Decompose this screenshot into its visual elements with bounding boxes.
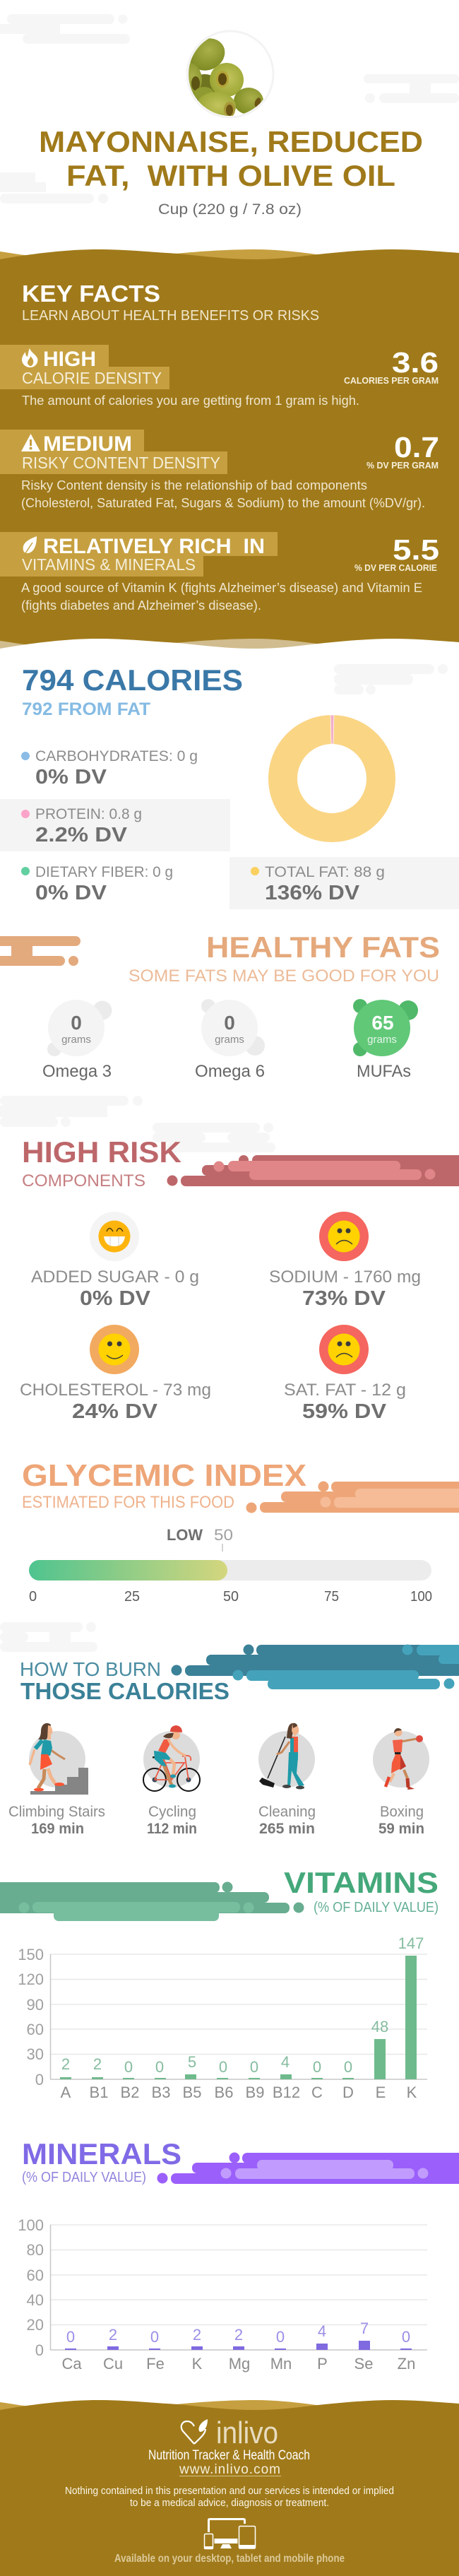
bar chart: minerals: 100 [18, 2216, 44, 2234]
bar chart: vitamins: B9 [246, 2084, 264, 2101]
icon: grinning face [99, 1221, 130, 1252]
fat badge: omega 6 [195, 999, 265, 1081]
fact: vitamins and minerals: % DV PER CALORIE [354, 562, 437, 573]
key facts subheading: LEARN ABOUT HEALTH BENEFITS OR RISKS [22, 308, 319, 324]
risk item: saturated fat: SAT. FAT - 12 g [284, 1381, 406, 1400]
bar chart: minerals: 4 [318, 2322, 326, 2340]
risk item: added sugar [31, 1212, 199, 1310]
fat badge: MUFAs: grams [367, 1034, 397, 1046]
activity: cleaning: Cleaning [258, 1804, 316, 1820]
gauge: glycemic index: LOW [167, 1526, 203, 1544]
bar chart: vitamins: 90 [27, 1996, 44, 2014]
bar chart: minerals: 60 [27, 2267, 44, 2284]
heading: how to burn [20, 1658, 230, 1704]
gauge: glycemic index: 0 [29, 1589, 37, 1605]
fact: calorie density: The amount of calories you are getting from 1 gram is high. [22, 394, 359, 408]
fat badge: omega 3: 0 [71, 1012, 82, 1034]
fat badge: MUFAs: MUFAs [357, 1062, 411, 1081]
fact: vitamins and minerals: (fights diabetes and Alzheimer’s disease). [21, 598, 261, 613]
risk item: sodium [269, 1212, 421, 1310]
bar chart: minerals: 80 [27, 2241, 44, 2259]
bar chart: vitamins: 60 [27, 2021, 44, 2038]
bar chart: vitamins: A [61, 2084, 71, 2101]
icon: flame [22, 348, 37, 367]
fact: calorie density: CALORIES PER GRAM [344, 375, 439, 386]
title [39, 125, 423, 192]
fact: vitamins and minerals: RELATIVELY RICH IN [43, 535, 265, 558]
bar chart: minerals: Zn [398, 2355, 415, 2373]
legend: total fat: 136% DV [265, 882, 360, 904]
fact: risky content density: % DV PER GRAM [366, 460, 439, 471]
bar chart: vitamins: 2 [93, 2055, 102, 2073]
fact: calorie density [0, 345, 439, 408]
risk item: saturated fat: 59% DV [302, 1400, 387, 1423]
logo: inlivo: inlivo [216, 2416, 278, 2450]
bar chart: vitamins: B2 [121, 2084, 139, 2101]
activity: boxing: Boxing [380, 1804, 424, 1820]
legend: carbohydrates: 0% DV [35, 766, 107, 788]
bar chart: vitamins: D [342, 2084, 354, 2101]
legend: protein: 2.2% DV [35, 824, 128, 846]
tagline: Nutrition Tracker & Health Coach [148, 2448, 310, 2463]
bar chart: minerals: 2 [234, 2326, 243, 2344]
legend: total fat [230, 857, 459, 909]
bar chart: minerals: 0 [150, 2328, 159, 2346]
bar chart: vitamins: 0 [35, 2071, 44, 2088]
bar chart: minerals: 40 [27, 2291, 44, 2309]
bar chart: vitamins: B12 [273, 2084, 300, 2101]
legend: protein [0, 799, 230, 851]
gauge: glycemic index [29, 1526, 432, 1605]
activity: climbing stairs: Climbing Stairs [8, 1804, 105, 1820]
legend: protein: PROTEIN: 0.8 g [35, 806, 142, 822]
decoration: high risk stripes [167, 1155, 459, 1186]
bar chart: minerals: P [317, 2355, 328, 2373]
icon: woman climbing stairs [30, 1723, 88, 1795]
bar chart: minerals: 0 [35, 2341, 44, 2359]
bar chart: vitamins: 150 [18, 1946, 44, 1963]
subheading: minerals daily value: (% OF DAILY VALUE) [22, 2170, 146, 2185]
legend: dietary fiber [21, 864, 173, 904]
title: MAYONNAISE, REDUCED [39, 125, 423, 158]
background cloud: right [364, 74, 459, 103]
heading: how to burn: THOSE CALORIES [20, 1678, 230, 1704]
icon: smiling face [99, 1334, 130, 1365]
background cloud: top left [0, 14, 130, 44]
bar chart: minerals: 0 [276, 2328, 285, 2346]
heading: glycemic index: GLYCEMIC INDEX [22, 1458, 306, 1493]
bar chart: minerals: Ca [61, 2355, 82, 2373]
icon: devices [204, 2519, 256, 2549]
bar chart: vitamins [18, 1934, 427, 2101]
background cloud: left [0, 172, 108, 203]
website link: www.inlivo.com [179, 2462, 280, 2477]
food photo: olives [186, 30, 274, 119]
serving size: Cup (220 g / 7.8 oz) [158, 201, 302, 218]
fat badge: omega 6: Omega 6 [195, 1062, 265, 1081]
activity: cleaning [258, 1723, 316, 1837]
fact: risky content density [0, 430, 439, 510]
icon: sad face [328, 1221, 360, 1252]
disclaimer: to be a medical advice, diagnosis or treatment. [130, 2497, 329, 2509]
fat badge: omega 3 [42, 1000, 112, 1081]
gauge: glycemic index: 50 [223, 1589, 239, 1605]
gauge: glycemic index: 25 [124, 1589, 140, 1605]
decoration: vitamins stripes [0, 1882, 304, 1921]
fact: calorie density: 3.6 [392, 346, 439, 379]
bar chart: minerals: Mn [270, 2355, 292, 2373]
fat badge: omega 3: grams [61, 1034, 91, 1046]
gauge: glycemic index: 100 [410, 1589, 432, 1605]
background cloud: high risk left [0, 1096, 143, 1127]
risk item: sodium: 73% DV [302, 1287, 386, 1310]
bar chart: vitamins: 4 [281, 2053, 290, 2071]
risk item: saturated fat [284, 1325, 406, 1423]
bar chart: minerals [18, 2216, 427, 2373]
decoration: minerals stripes [157, 2152, 459, 2184]
activity: boxing [373, 1728, 429, 1837]
bar chart: vitamins: E [376, 2084, 386, 2101]
fat badge: MUFAs: 65 [371, 1012, 394, 1034]
bar chart: vitamins: 5 [188, 2053, 196, 2071]
risk item: sodium: SODIUM - 1760 mg [269, 1268, 421, 1287]
bar chart: minerals: 0 [402, 2328, 410, 2346]
bar chart: vitamins: C [311, 2084, 323, 2101]
activity: cycling: Cycling [148, 1804, 196, 1820]
panel: footer [0, 2400, 459, 2576]
bar chart: vitamins: 48 [371, 2018, 388, 2036]
risk item: cholesterol [20, 1325, 211, 1423]
heading: minerals: MINERALS [22, 2137, 181, 2170]
icon: sad face [328, 1334, 360, 1365]
fact: risky content density: 0.7 [394, 431, 439, 463]
activity: climbing stairs: 169 min [31, 1821, 84, 1837]
risk item: added sugar: ADDED SUGAR - 0 g [31, 1268, 199, 1287]
fat badge: omega 3: Omega 3 [42, 1062, 112, 1081]
bar chart: minerals: 7 [360, 2320, 369, 2337]
background cloud: calories [334, 664, 448, 695]
activity: cleaning: 265 min [259, 1821, 315, 1837]
decoration: glycemic stripes [246, 1481, 459, 1513]
donut chart: calorie sources [282, 715, 381, 828]
legend: dietary fiber: 0% DV [35, 882, 107, 904]
gauge: glycemic index: 75 [324, 1589, 339, 1605]
legend: dietary fiber: DIETARY FIBER: 0 g [35, 864, 173, 880]
fact: risky content density: (Cholesterol, Saturated Fat, Sugars & Sodium) to the amount (%DV/gr). [21, 496, 425, 510]
activity: cycling: 112 min [147, 1821, 197, 1837]
bar chart: minerals: Se [354, 2355, 373, 2373]
activity: boxing: 59 min [378, 1821, 424, 1837]
fact: calorie density: HIGH [43, 348, 96, 371]
subheading: glycemic index: ESTIMATED FOR THIS FOOD [22, 1493, 234, 1512]
disclaimer: Nothing contained in this presentation and our services is intended or implied [65, 2485, 394, 2497]
disclaimer [65, 2485, 394, 2509]
bar chart: vitamins: B5 [183, 2084, 201, 2101]
subheading: healthy fats: SOME FATS MAY BE GOOD FOR YOU [129, 967, 439, 986]
activity: climbing stairs [8, 1723, 105, 1837]
top wave [0, 249, 459, 268]
bottom wave [0, 639, 459, 658]
bar chart: minerals: 2 [109, 2326, 117, 2344]
icon: boxer [386, 1728, 423, 1790]
heading: healthy fats: HEALTHY FATS [206, 930, 440, 964]
fat badge: omega 6: 0 [224, 1012, 235, 1034]
fact: vitamins and minerals: VITAMINS & MINERALS [22, 555, 196, 574]
icon: woman sweeping [259, 1723, 304, 1789]
risk item: cholesterol: CHOLESTEROL - 73 mg [20, 1381, 211, 1400]
bar chart: minerals: 20 [27, 2316, 44, 2334]
bar chart: vitamins: 0 [124, 2058, 133, 2076]
fact: risky content density: MEDIUM [43, 432, 132, 456]
bar chart: minerals: Mg [229, 2355, 250, 2373]
bar chart: vitamins: 0 [344, 2058, 352, 2076]
logo: inlivo [181, 2416, 278, 2450]
bar chart: vitamins: 30 [27, 2045, 44, 2063]
fact: vitamins and minerals [0, 532, 439, 613]
bar chart: vitamins: K [407, 2084, 417, 2101]
bar chart: minerals: K [192, 2355, 203, 2373]
subheading: calories from fat: 792 FROM FAT [22, 699, 150, 719]
legend: carbohydrates: CARBOHYDRATES: 0 g [35, 748, 198, 764]
fat badge: omega 6: grams [215, 1034, 244, 1046]
fact: risky content density: Risky Content density is the relationship of bad components [21, 478, 367, 492]
bar chart: vitamins: 0 [155, 2058, 164, 2076]
bar chart: vitamins: 0 [250, 2058, 258, 2076]
title: FAT, WITH OLIVE OIL [66, 159, 395, 192]
risk item: cholesterol: 24% DV [72, 1400, 158, 1423]
bar chart: minerals: Cu [103, 2355, 123, 2373]
bar chart: vitamins: 147 [398, 1934, 424, 1952]
key facts heading: KEY FACTS [22, 280, 160, 307]
heading: calories: 794 CALORIES [22, 663, 243, 697]
bar chart: vitamins: B3 [152, 2084, 170, 2101]
fact: calorie density: CALORIE DENSITY [22, 369, 162, 387]
decoration: burn stripes [171, 1645, 459, 1689]
subheading: components: COMPONENTS [22, 1171, 145, 1190]
icon: warning triangle [21, 434, 40, 451]
decoration: healthy fats stripes [0, 936, 81, 966]
bar chart: minerals: Fe [146, 2355, 165, 2373]
bar chart: vitamins: B1 [90, 2084, 108, 2101]
icon: woman cycling [143, 1725, 200, 1791]
activity: cycling [143, 1725, 200, 1837]
heading: vitamins: VITAMINS [284, 1866, 439, 1899]
footer wave [0, 2400, 459, 2419]
legend: total fat: TOTAL FAT: 88 g [265, 864, 385, 880]
bar chart: minerals: 2 [193, 2326, 201, 2344]
bar chart: vitamins: 0 [313, 2058, 321, 2076]
availability note: Available on your desktop, tablet and mobile phone [114, 2553, 345, 2565]
risk item: added sugar: 0% DV [80, 1287, 151, 1310]
background cloud: high risk right [153, 1123, 275, 1152]
bar chart: vitamins: 120 [18, 1971, 44, 1988]
bar chart: vitamins: B6 [215, 2084, 233, 2101]
gauge: glycemic index: 50 [214, 1526, 233, 1544]
legend: carbohydrates [21, 748, 198, 788]
fact: vitamins and minerals: A good source of Vitamin K (fights Alzheimer’s disease) and Vitamin E [21, 581, 422, 595]
heading: how to burn: HOW TO BURN [20, 1658, 161, 1680]
panel: key facts [0, 249, 459, 658]
fat badge: MUFAs [353, 999, 418, 1081]
fact: vitamins and minerals: 5.5 [393, 533, 439, 566]
icon: leaf [23, 536, 37, 553]
background cloud: burn [0, 1622, 97, 1652]
fact: risky content density: RISKY CONTENT DENSITY [22, 454, 220, 472]
bar chart: vitamins: 2 [61, 2055, 70, 2073]
bar chart: minerals: 0 [66, 2328, 75, 2346]
subheading: vitamins daily value: (% OF DAILY VALUE) [314, 1900, 439, 1915]
heading: high risk: HIGH RISK [22, 1135, 181, 1169]
bar chart: vitamins: 0 [219, 2058, 227, 2076]
